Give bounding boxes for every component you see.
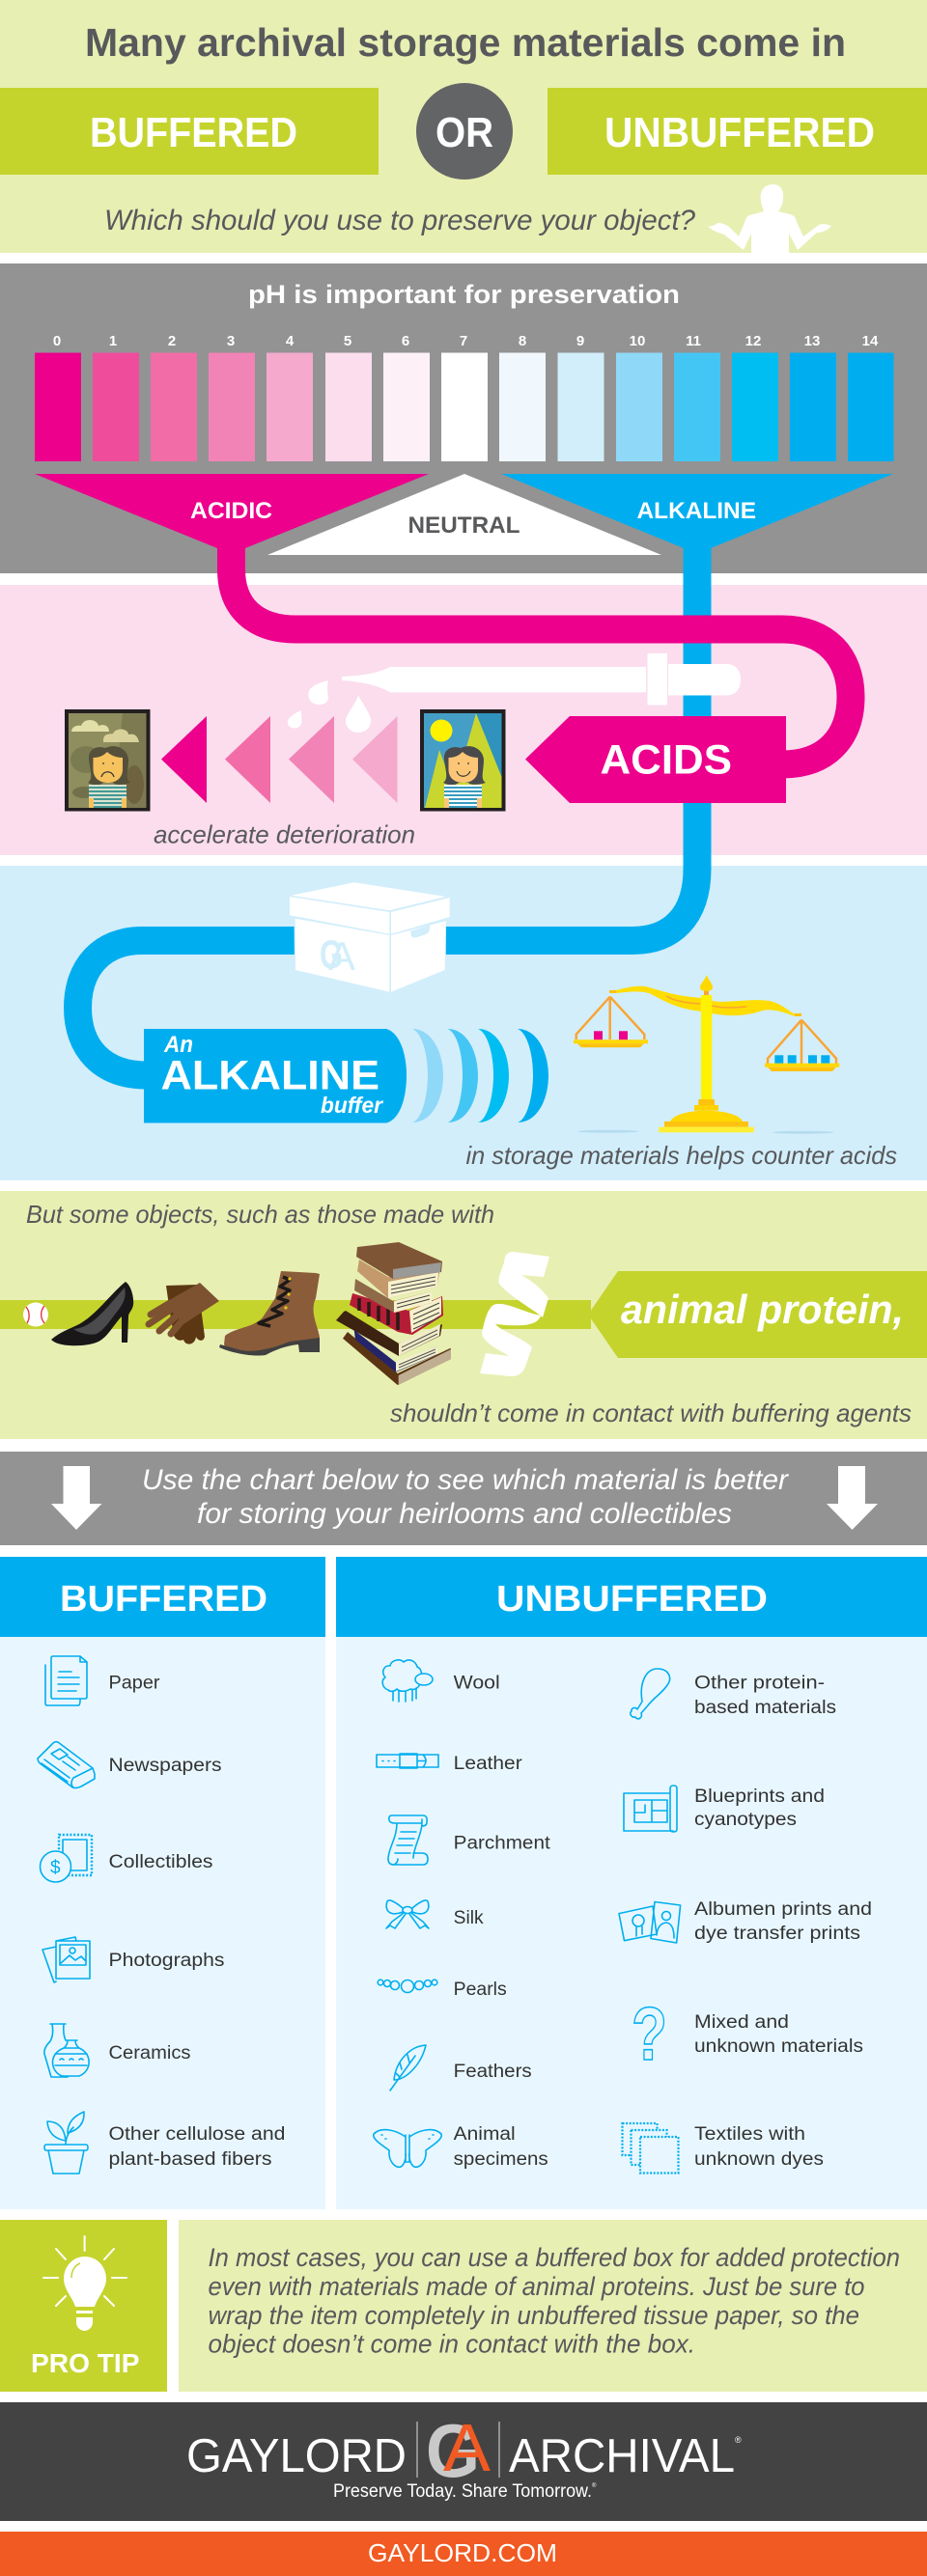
item: newspapers: Newspapers — [108, 1756, 222, 1776]
item: albumen prints — [619, 1899, 872, 1944]
pH numbers: 1 — [109, 333, 117, 349]
icon: shrugging person — [708, 184, 831, 253]
label: pro tip: PRO TIP — [31, 2348, 139, 2378]
item: mixed unknown: Mixed and — [694, 2012, 789, 2033]
pH numbers — [53, 333, 879, 349]
item: textiles — [622, 2123, 824, 2174]
arrow: left down — [51, 1466, 102, 1530]
item: animal specimens: specimens — [454, 2149, 548, 2170]
panel: pro tip text: In most cases, you can use a buffered box for added protection — [209, 2243, 900, 2272]
item: wool: Wool — [454, 1674, 500, 1693]
logo: wordmark: A — [443, 2410, 491, 2485]
logo: tagline: Preserve Today. Share Tomorrow. — [333, 2481, 592, 2502]
caption: accelerate deterioration: accelerate deterioration — [154, 820, 415, 849]
pH numbers: 2 — [168, 333, 176, 349]
tag: acids — [525, 716, 786, 803]
portrait: deteriorated — [65, 709, 151, 811]
item: leather — [377, 1754, 522, 1774]
item: collectibles: Collectibles — [108, 1852, 212, 1872]
icon: gloves — [149, 1283, 219, 1344]
item: silk — [386, 1900, 484, 1928]
panel: pro tip text: even with materials made of animal proteins. Just be sure to — [209, 2272, 865, 2301]
portrait: healthy — [420, 709, 506, 811]
pH numbers: 7 — [460, 333, 467, 349]
panel: unbuffered list — [336, 1557, 927, 2209]
battery: alkaline buffer: buffer — [321, 1093, 383, 1118]
tag: acids: ACIDS — [601, 737, 732, 784]
panel: pro tip badge — [0, 2220, 167, 2392]
icon: light bulb — [43, 2236, 126, 2331]
funnel: acidic: ACIDIC — [190, 498, 272, 524]
icon: archival box: G — [320, 931, 343, 977]
funnel: alkaline — [501, 474, 893, 573]
panel: pH scale — [0, 263, 927, 573]
heading: unbuffered: UNBUFFERED — [496, 1579, 768, 1620]
item: textiles: Textiles with — [694, 2124, 805, 2145]
panel: chart intro — [0, 1452, 927, 1545]
pH numbers: 13 — [804, 333, 820, 349]
pH bars — [35, 353, 894, 461]
title: Many archival storage materials come in — [85, 20, 846, 65]
item: mixed unknown: ? — [632, 1991, 667, 2076]
item: pearls — [378, 1980, 507, 2000]
question text: Which should you use to preserve your object? — [104, 205, 695, 236]
icon: baseball — [23, 1303, 48, 1326]
item: animal specimens — [374, 2124, 548, 2170]
panel: buffered list — [0, 1557, 325, 2209]
item: other protein — [631, 1669, 836, 1719]
icon: protein ribbon — [480, 1252, 549, 1376]
text: but some objects: But some objects, such as those made with — [26, 1200, 494, 1229]
item: feathers: Feathers — [454, 2062, 532, 2082]
icon: archival box — [290, 882, 450, 993]
pH numbers: 0 — [53, 333, 61, 349]
item: parchment: Parchment — [454, 1834, 550, 1854]
band — [0, 1300, 591, 1329]
item: silk: Silk — [454, 1908, 484, 1928]
panel: website bar — [0, 2532, 927, 2576]
item: paper: Paper — [108, 1674, 160, 1693]
item: collectibles: $ — [50, 1858, 61, 1878]
icon: balance scale — [574, 975, 839, 1134]
item: other protein: Other protein- — [694, 1674, 825, 1693]
logo: wordmark: GAYLORD — [186, 2430, 407, 2482]
item: mixed unknown: unknown materials — [694, 2036, 863, 2057]
battery: alkaline buffer: An — [163, 1032, 193, 1058]
badge: or: OR — [435, 109, 493, 156]
icon: stack of books — [336, 1242, 451, 1385]
banner: unbuffered — [548, 88, 927, 175]
panel: acids background — [0, 585, 927, 855]
panel: animal protein — [0, 1191, 927, 1439]
logo: tagline: ® — [592, 2482, 597, 2489]
pH numbers: 4 — [286, 333, 295, 349]
caption: shouldn't come in contact: shouldn’t come in contact with buffering agents — [390, 1399, 912, 1427]
item: feathers — [390, 2045, 532, 2091]
icon: boot — [219, 1271, 320, 1356]
panel: pro tip text: wrap the item completely in unbuffered tissue paper, so the — [209, 2301, 859, 2330]
heading: pH: pH is important for preservation — [248, 280, 680, 309]
item: parchment — [388, 1815, 550, 1865]
logo: wordmark — [186, 2408, 742, 2493]
icon: high heel — [51, 1282, 133, 1345]
item: newspapers — [38, 1742, 222, 1787]
item: blueprints — [624, 1786, 825, 1832]
battery: alkaline buffer: ALKALINE — [160, 1053, 379, 1099]
banner: buffered: BUFFERED — [90, 109, 297, 156]
intro text: Use the chart below to see which material is better — [142, 1464, 789, 1496]
logo: wordmark: ® — [735, 2435, 742, 2445]
item: paper — [45, 1656, 160, 1705]
tube: pink acid pipe — [232, 546, 851, 764]
heading: buffered: BUFFERED — [60, 1579, 267, 1620]
item: blueprints: cyanotypes — [694, 1810, 797, 1830]
caption: counter acids: in storage materials helps counter acids — [465, 1141, 897, 1170]
panel: pro tip text — [179, 2220, 927, 2392]
triangle: neutral — [267, 474, 661, 555]
logo: wordmark: G — [426, 2408, 480, 2493]
banner: buffered — [0, 88, 379, 175]
pH numbers: 10 — [630, 333, 645, 349]
pH numbers: 6 — [402, 333, 409, 349]
item: other cellulose: plant-based fibers — [108, 2149, 272, 2170]
panel: website bar: GAYLORD.COM — [368, 2538, 557, 2567]
icon: archival box: A — [328, 933, 355, 979]
pH numbers: 12 — [745, 333, 761, 349]
item: albumen prints: Albumen prints and — [694, 1899, 872, 1920]
tube: blue alkaline pipe — [77, 546, 697, 1075]
item: collectibles — [41, 1835, 212, 1882]
item: leather: Leather — [454, 1754, 522, 1774]
pH numbers: 3 — [227, 333, 235, 349]
tag: animal protein — [588, 1271, 927, 1358]
label: alkaline: ALKALINE — [637, 498, 756, 524]
triangle: neutral: NEUTRAL — [407, 512, 520, 539]
item: albumen prints: dye transfer prints — [694, 1924, 860, 1944]
pH numbers: 8 — [519, 333, 526, 349]
funnel: acidic — [35, 474, 429, 573]
item: textiles: unknown dyes — [694, 2149, 824, 2170]
item: mixed unknown — [632, 1991, 863, 2076]
panel: pro tip text: object doesn’t come in contact with the box. — [209, 2330, 695, 2359]
battery: alkaline buffer — [144, 1029, 407, 1123]
tag: animal protein: animal protein, — [621, 1287, 904, 1332]
logo: wordmark: ARCHIVAL — [509, 2430, 735, 2482]
banner: unbuffered: UNBUFFERED — [604, 109, 875, 156]
item: wool — [382, 1660, 500, 1702]
icon: pipette and drops — [288, 653, 741, 733]
panel: footer logo — [0, 2402, 927, 2521]
item: blueprints: Blueprints and — [694, 1787, 825, 1807]
panel: header — [0, 0, 927, 253]
pH numbers: 5 — [344, 333, 351, 349]
item: other cellulose: Other cellulose and — [108, 2124, 286, 2145]
item: ceramics: Ceramics — [108, 2043, 191, 2064]
item: other protein: based materials — [694, 1698, 836, 1718]
pH numbers: 11 — [686, 333, 701, 349]
panel: alkaline background — [0, 866, 927, 1180]
item: pearls: Pearls — [454, 1980, 507, 2000]
arrow: right down — [827, 1466, 878, 1530]
item: other cellulose — [44, 2112, 286, 2174]
arrows: deterioration triangles — [161, 716, 398, 803]
item: photographs — [42, 1937, 224, 1982]
pH numbers: 9 — [576, 333, 584, 349]
intro text: for storing your heirlooms and collectibles — [197, 1498, 732, 1530]
badge: or — [416, 83, 513, 180]
item: ceramics — [44, 2024, 191, 2077]
pH numbers: 14 — [862, 333, 879, 349]
intro text — [142, 1464, 789, 1530]
item: photographs: Photographs — [108, 1951, 224, 1971]
icon: buffer waves — [412, 1029, 548, 1122]
item: animal specimens: Animal — [454, 2124, 516, 2145]
